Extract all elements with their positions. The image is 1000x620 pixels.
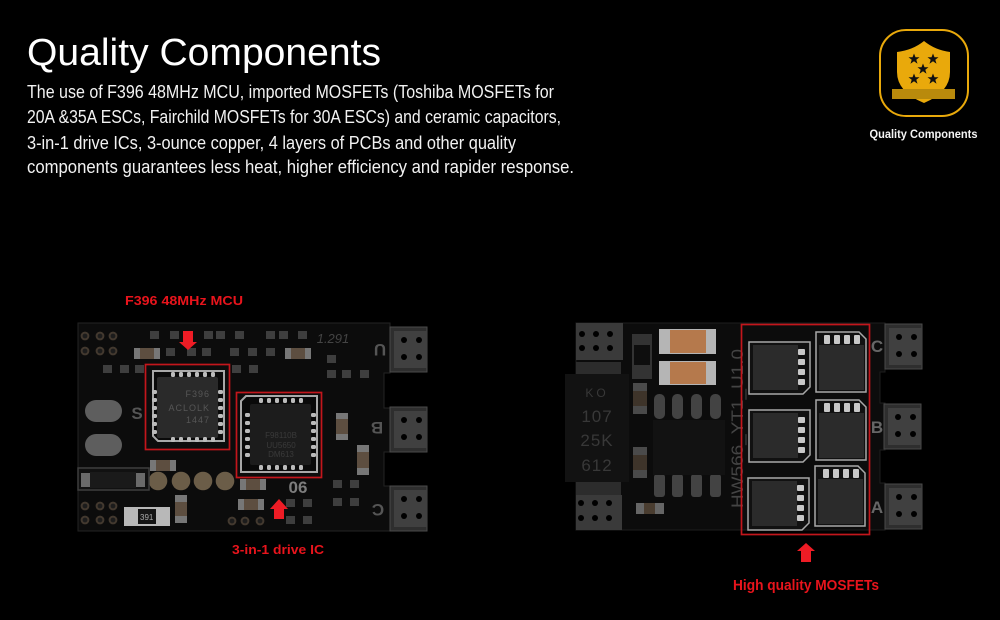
board substrate: [576, 323, 885, 530]
connector pads: [884, 324, 922, 529]
board markings: 1.291: [317, 331, 349, 346]
drive IC chip: [241, 396, 317, 472]
drive IC chip: DM613: [268, 450, 294, 459]
left connector pads: [576, 323, 623, 530]
title: Quality Components: [27, 32, 381, 74]
board substrate: [78, 323, 390, 531]
SOIC driver chip: [653, 394, 725, 497]
large diode: [565, 362, 629, 495]
description text block: The use of F396 48MHz MCU, imported MOSFETs (Toshiba MOSFETs for: [27, 82, 554, 102]
MCU chip: F396: [185, 389, 210, 399]
right PCB board: [565, 323, 922, 534]
phase letters: S: [131, 404, 143, 423]
left PCB board: [78, 323, 427, 531]
crystal oval pads: [85, 400, 122, 456]
MCU chip: [152, 371, 224, 442]
phase letters: C: [372, 500, 384, 519]
board markings: 06: [289, 478, 307, 497]
red highlight: drive IC: [236, 392, 322, 478]
drive IC chip: UU5650: [266, 441, 296, 450]
description text block: 3-in-1 drive ICs, 3-ounce copper, 4 layers of PCBs and other quality: [27, 133, 516, 153]
arrow: up to MOSFETs: [797, 543, 815, 562]
MOSFET array: [748, 332, 866, 530]
phase letters: B: [871, 418, 883, 437]
small pads: [103, 331, 369, 524]
description text block: 20A &35A ESCs, Fairchild MOSFETs for 30A ESCs) and ceramic capacitors,: [27, 107, 561, 127]
small component top left: [632, 334, 664, 514]
icon: shield with stars: [892, 41, 955, 103]
ceramic capacitors: [659, 329, 716, 385]
large diode: 612: [581, 456, 613, 475]
diode and resistor: [78, 468, 170, 526]
diode and resistor: 391: [140, 513, 154, 522]
large diode: 25K: [580, 431, 614, 450]
description text block: components guarantees less heat, higher efficiency and rapider response.: [27, 157, 574, 177]
MCU chip: ACLOLK: [168, 403, 210, 413]
vertical board text: HW566_YT1_U1.0: [728, 349, 747, 508]
icon: rounded badge outline: [880, 30, 968, 116]
phase letters: C: [871, 337, 883, 356]
badge caption: Quality Components: [870, 127, 978, 141]
phase letters: [131, 340, 386, 519]
phase letters: B: [371, 418, 383, 437]
badge: quality components: [870, 30, 978, 141]
arrow: down to MCU: [179, 331, 197, 350]
small capacitors: [134, 348, 369, 523]
connector pads: [390, 327, 427, 531]
phase letters: A: [871, 498, 883, 517]
board markings: [289, 331, 349, 497]
label: F396 48MHz MCU: F396 48MHz MCU: [125, 293, 243, 308]
large diode: 107: [581, 407, 613, 426]
large diode: KO: [585, 386, 609, 400]
MCU chip: 1447: [186, 415, 210, 425]
through holes: [82, 333, 263, 524]
phase letters: [871, 337, 883, 517]
label: High quality MOSFETs: High quality MOSFETs: [733, 578, 879, 594]
red highlight: MCU: [146, 364, 230, 450]
phase letters: U: [374, 340, 386, 359]
arrow: up to drive IC: [270, 499, 288, 519]
red highlight: MOSFETs: [742, 324, 870, 534]
label: 3-in-1 drive IC: 3-in-1 drive IC: [232, 542, 325, 557]
round gold pads: [149, 472, 234, 490]
description text block: [27, 82, 574, 177]
drive IC chip: F98110B: [265, 431, 297, 440]
